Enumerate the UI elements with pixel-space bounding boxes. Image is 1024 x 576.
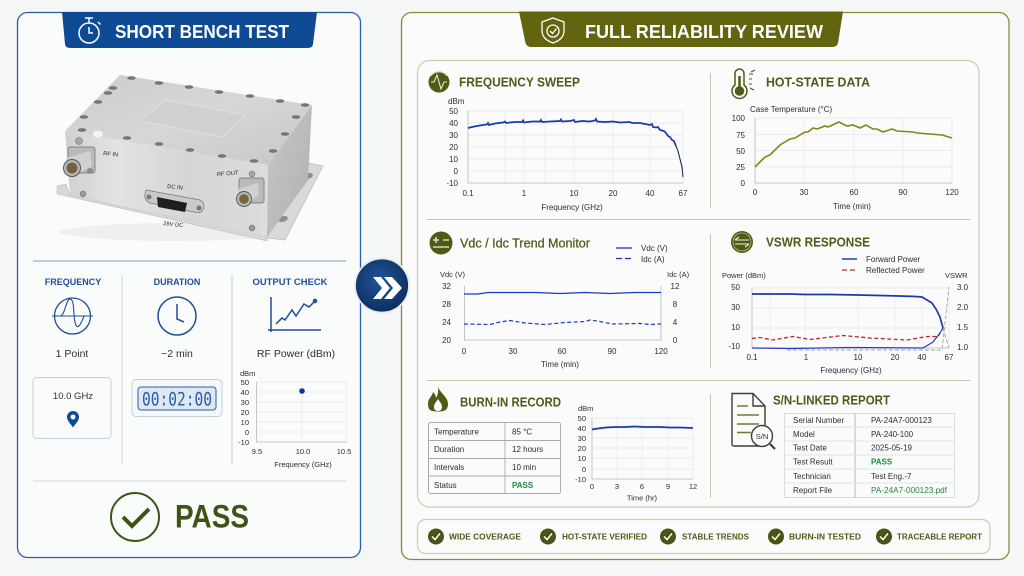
- table: report data: 2025-05-19: [871, 444, 912, 452]
- heading: duration: DURATION: [154, 277, 200, 287]
- heading: FREQUENCY SWEEP: [459, 76, 580, 90]
- Idc line: [464, 320, 661, 324]
- table: burn-in parameters: 10 min: [512, 463, 536, 472]
- chart: voltage and current trend: Vdc (V): [440, 270, 466, 279]
- forward power line: [752, 294, 943, 328]
- chart: voltage and current trend: 32: [442, 282, 452, 291]
- chart: voltage and current trend: 90: [608, 347, 617, 356]
- chart: frequency sweep: 10: [570, 189, 579, 198]
- chart: burn-in power: 0: [582, 465, 586, 474]
- chart: case temperature: 75: [736, 131, 746, 140]
- chart: case temperature: 120: [945, 188, 959, 197]
- table: burn-in parameters: 12 hours: [512, 445, 543, 454]
- chart: case temperature: 25: [736, 163, 746, 172]
- chart: frequency sweep: dBm: [448, 97, 465, 106]
- table: report data: Technician: [793, 472, 831, 481]
- chart: single point power: 10: [241, 418, 249, 427]
- top face: [65, 75, 312, 165]
- chart: VSWR power: VSWR: [945, 271, 968, 280]
- chart: case temperature: Time (min): [833, 202, 871, 211]
- chart: voltage and current trend: 0: [673, 336, 678, 345]
- legend: Idc (A): [641, 255, 665, 264]
- chart: frequency sweep: 40: [449, 119, 459, 128]
- badge: traceable report: [876, 528, 983, 544]
- column: duration: [132, 277, 222, 416]
- table: burn-in parameters: 85 °C: [512, 428, 532, 436]
- front face: [65, 131, 268, 237]
- data point: [299, 388, 305, 394]
- summary strip: [418, 520, 990, 554]
- chart: single point power: 40: [241, 388, 249, 397]
- badge: traceable report: TRACEABLE REPORT: [897, 532, 983, 542]
- chart: voltage and current trend: Time (min): [541, 360, 579, 369]
- chart: frequency sweep: 0: [454, 167, 459, 176]
- chart: single point power: dBm: [240, 369, 255, 378]
- arrow button: [355, 258, 409, 312]
- legend: Reflected Power: [866, 266, 925, 275]
- chart: frequency sweep: [446, 97, 688, 212]
- chart: VSWR power: 2.0: [957, 303, 969, 312]
- badge: burn-in tested: BURN-IN TESTED: [789, 532, 861, 542]
- chart: VSWR power: 40: [918, 353, 927, 362]
- chart: VSWR power: 0.1: [746, 353, 758, 362]
- connector: DC in: [145, 190, 204, 213]
- chart: frequency sweep: Frequency (GHz): [541, 203, 603, 212]
- chart: VSWR power: [722, 271, 969, 375]
- Vdc line: [464, 292, 661, 294]
- chart: VSWR power: 67: [945, 353, 954, 362]
- heading: HOT-STATE DATA: [766, 76, 870, 90]
- legend: Forward Power: [866, 255, 921, 264]
- heading: S/N-LINKED REPORT: [773, 394, 890, 408]
- heading banner: full reliability review: [519, 12, 843, 47]
- chart: burn-in power: 40: [578, 424, 586, 433]
- table: report data: [784, 414, 954, 498]
- table: report data: Report File: [793, 486, 833, 495]
- chart: burn-in power: 0: [590, 482, 594, 491]
- chart: VSWR power: 1: [804, 353, 809, 362]
- chart: burn-in power: 50: [578, 414, 586, 423]
- chart: burn-in power: 6: [640, 482, 644, 491]
- chart: burn-in power: -10: [575, 475, 586, 484]
- chart: burn-in power: 20: [578, 444, 586, 453]
- chart: voltage and current trend: 60: [558, 347, 567, 356]
- badge: wide coverage: WIDE COVERAGE: [449, 532, 521, 542]
- section: hot-state data: [732, 69, 959, 211]
- right flange: [267, 163, 323, 240]
- chart: single point power: 10.0: [296, 447, 310, 456]
- chart: single point power: 0: [245, 428, 249, 437]
- chart: VSWR power: 10: [731, 323, 741, 332]
- table: burn-in parameters: Duration: [434, 445, 464, 454]
- connector: RF out: [236, 171, 264, 207]
- table: burn-in parameters: [428, 422, 560, 494]
- chart: frequency sweep: 30: [449, 131, 459, 140]
- badge: stable trends: STABLE TRENDS: [682, 532, 749, 542]
- chart: burn-in power: 10: [578, 454, 586, 463]
- chart: frequency sweep: 40: [646, 189, 655, 198]
- chart: VSWR power: -10: [728, 342, 741, 351]
- result: pass: PASS: [175, 498, 249, 534]
- heading: output check: OUTPUT CHECK: [252, 277, 328, 287]
- heading: frequency: FREQUENCY: [45, 277, 101, 287]
- chart: case temperature: 90: [899, 188, 908, 197]
- chart: voltage and current trend: Idc (A): [667, 270, 690, 279]
- chart: VSWR power: Frequency (GHz): [820, 366, 882, 375]
- legend: [842, 255, 925, 275]
- left base strip: [57, 184, 267, 241]
- icon: location pin: [67, 411, 79, 428]
- chart: single point power: [238, 369, 351, 469]
- chart: single point power: 30: [241, 398, 249, 407]
- result: pass: [111, 493, 249, 541]
- value: RF power: RF Power (dBm): [257, 348, 335, 360]
- column: output check: [238, 277, 351, 469]
- device photo: amplifier module: RF OUT: [217, 170, 239, 178]
- section: S/N-linked report: [732, 394, 954, 498]
- digital timer: 00:02:00: [142, 390, 212, 410]
- icon: shield check: [542, 18, 564, 43]
- table: report data: Test Result: [793, 458, 833, 466]
- chart: burn-in power: 30: [578, 434, 586, 443]
- section: VSWR response: [722, 231, 969, 375]
- chart: voltage and current trend: 0: [462, 347, 467, 356]
- chart: case temperature: Case Temperature (°C): [750, 105, 833, 114]
- panel: short bench test: [18, 12, 360, 558]
- chart: VSWR power: 30: [731, 303, 741, 312]
- heading banner: short bench test: [62, 12, 317, 48]
- chart: VSWR power: 50: [731, 283, 741, 292]
- chart: burn-in power: 3: [615, 482, 619, 491]
- icon: double chevron: [373, 277, 402, 299]
- chart: single point power: 9.5: [252, 447, 262, 456]
- chart: frequency sweep: 67: [679, 189, 688, 198]
- chart: VSWR power: 3.0: [957, 283, 969, 292]
- value: 1 point: 1 Point: [56, 348, 88, 360]
- icon: plus minus circle: [430, 232, 452, 254]
- badge: burn-in tested: [768, 528, 861, 544]
- side face: [267, 105, 312, 237]
- table: report data: PASS: [871, 458, 893, 466]
- table: burn-in parameters: Status: [434, 481, 457, 490]
- device photo: amplifier module: [57, 75, 323, 241]
- chart: burn-in power: [575, 404, 697, 502]
- chart: frequency sweep: -10: [446, 179, 459, 188]
- chart: voltage and current trend: 8: [673, 300, 678, 309]
- card: 10.0 GHz: 10.0 GHz: [53, 391, 93, 402]
- chart: VSWR power: 1.0: [957, 343, 969, 352]
- chart: burn-in power: Time (hr): [627, 494, 658, 502]
- chart: single point power: 10.5: [337, 447, 351, 456]
- table: report data: PA-240-100: [871, 430, 914, 439]
- section: S/N-linked report: S/N: [756, 432, 768, 441]
- legend: [616, 244, 668, 264]
- heading: Vdc / Idc Trend Monitor: [460, 236, 590, 250]
- chart: single point power: Frequency (GHz): [274, 460, 332, 469]
- panel: full reliability review: [402, 12, 1009, 560]
- chart: case temperature: 30: [800, 188, 809, 197]
- chart: frequency sweep: 20: [449, 143, 459, 152]
- device photo: amplifier module: 28V DC: [163, 221, 184, 229]
- chart: case temperature: 100: [732, 114, 746, 123]
- table: report data: Serial Number: [793, 416, 844, 425]
- heading: BURN-IN RECORD: [460, 396, 561, 410]
- table: report data: Test Eng.-7: [871, 472, 912, 481]
- chart: VSWR power: 1.5: [957, 323, 969, 332]
- badge: wide coverage: [428, 528, 521, 544]
- icon: sweep circle: [428, 72, 450, 92]
- chart: case temperature: [732, 105, 959, 211]
- chart: voltage and current trend: 24: [442, 318, 452, 327]
- icon: thermometer: [732, 69, 755, 99]
- table: report data: PA-24A7-000123.pdf: [871, 486, 948, 495]
- chart: voltage and current trend: [440, 270, 690, 369]
- chart: frequency sweep: 50: [449, 107, 459, 116]
- VSWR line: [787, 287, 949, 350]
- icon: document with magnifier: [732, 394, 775, 449]
- chart: single point power: -10: [238, 438, 249, 447]
- chart: frequency sweep: 0.1: [462, 189, 474, 198]
- chart: VSWR power: 10: [854, 353, 863, 362]
- data line: [592, 426, 693, 430]
- legend: Vdc (V): [641, 244, 668, 253]
- chart: case temperature: 60: [850, 188, 859, 197]
- icon: stopwatch: [79, 18, 100, 43]
- chart: single point power: 20: [241, 408, 249, 417]
- section: burn-in record: [428, 387, 697, 502]
- table: burn-in parameters: Intervals: [434, 463, 464, 472]
- lower power line: [752, 328, 943, 348]
- value: about 2 minutes: ~2 min: [161, 348, 193, 360]
- icon: flame: [428, 387, 448, 412]
- icon: check circle: [111, 493, 159, 541]
- chart: VSWR power: 20: [891, 353, 900, 362]
- device photo: amplifier module: DC IN: [167, 184, 183, 192]
- section: Vdc / Idc trend monitor: [430, 232, 690, 369]
- table: burn-in parameters: PASS: [512, 481, 534, 490]
- table: burn-in parameters: Temperature: [434, 428, 479, 436]
- chart: single point power: 50: [241, 378, 249, 387]
- chart: burn-in power: dBm: [578, 404, 593, 413]
- chart: voltage and current trend: 20: [442, 336, 452, 345]
- chart: VSWR power: Power (dBm): [722, 271, 766, 280]
- icon: clock: [158, 297, 196, 335]
- data line: [755, 122, 952, 167]
- chart: case temperature: 0: [741, 179, 746, 188]
- badge: hot-state verified: [540, 528, 647, 544]
- icon: sine wave circle: [52, 298, 93, 334]
- heading: VSWR RESPONSE: [766, 236, 870, 250]
- chart: frequency sweep: 10: [449, 155, 459, 164]
- chart: frequency sweep: 1: [522, 189, 527, 198]
- chart: voltage and current trend: 12: [671, 282, 680, 291]
- data line: [468, 119, 676, 146]
- icon: VSWR circle: [731, 231, 753, 253]
- heading text: FULL RELIABILITY REVIEW: [585, 21, 824, 42]
- device labels: RF IN: [103, 151, 118, 159]
- chart: voltage and current trend: 4: [673, 318, 678, 327]
- chart: burn-in power: 12: [689, 482, 697, 491]
- heading text: SHORT BENCH TEST: [115, 21, 290, 42]
- chart: case temperature: 0: [753, 188, 758, 197]
- badge: stable trends: [660, 528, 749, 544]
- table: report data: Model: [793, 430, 815, 439]
- chart: voltage and current trend: 30: [509, 347, 518, 356]
- card: 10.0 GHz: [33, 378, 111, 438]
- chart: voltage and current trend: 28: [442, 300, 452, 309]
- badge: hot-state verified: HOT-STATE VERIFIED: [562, 532, 647, 542]
- chart: voltage and current trend: 120: [654, 347, 668, 356]
- table: report data: Test Date: [793, 444, 827, 452]
- connector: RF in: [64, 138, 95, 178]
- column: frequency: [33, 277, 111, 438]
- section: frequency sweep: [428, 72, 688, 212]
- icon: rising line chart: [268, 297, 321, 332]
- table: report data: PA-24A7-000123: [871, 416, 932, 425]
- chart: case temperature: 50: [736, 147, 746, 156]
- chart: burn-in power: 9: [666, 482, 670, 491]
- chart: frequency sweep: 20: [609, 189, 618, 198]
- reflected power line: [752, 328, 943, 340]
